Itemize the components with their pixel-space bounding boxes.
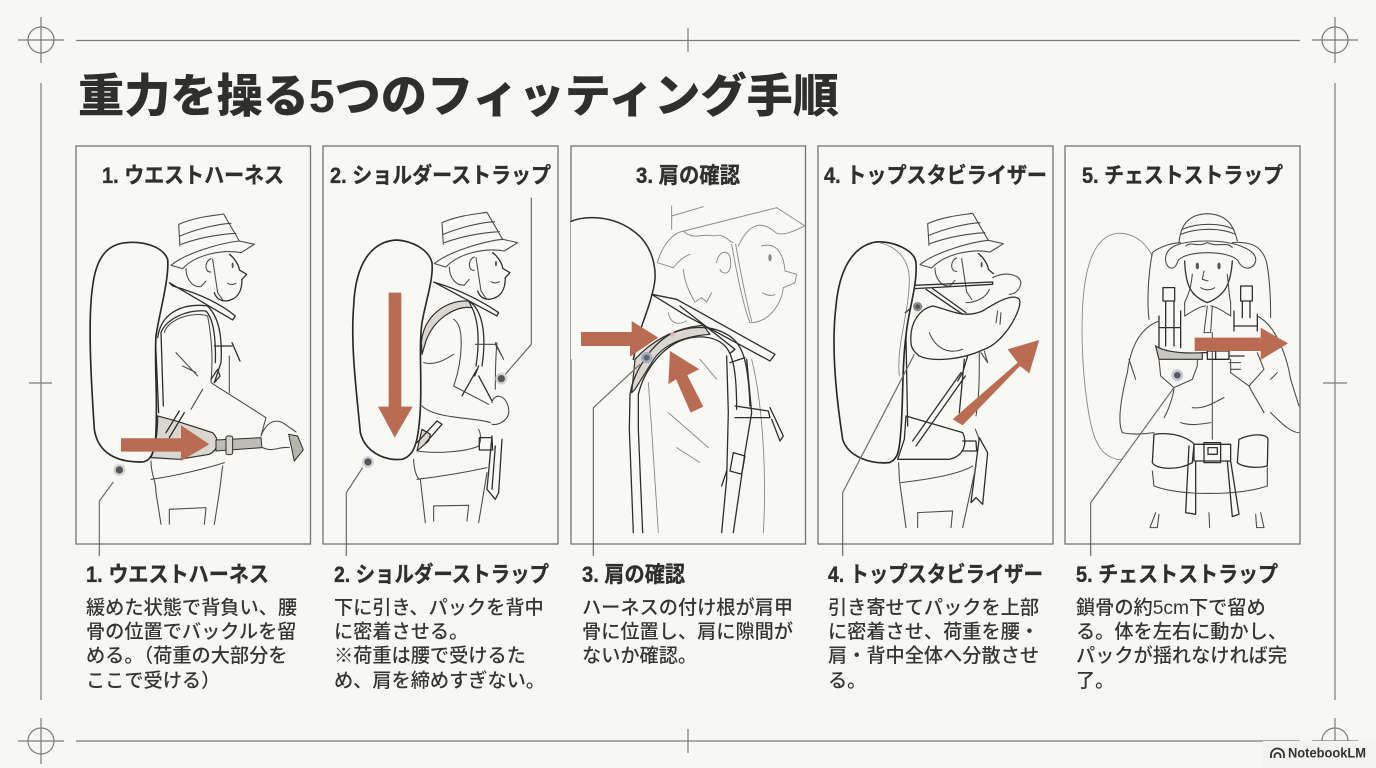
caption text: step 5: 了。 [1076, 671, 1114, 692]
arrow: pull strap down [378, 293, 413, 438]
panel: step 2 shoulder strap [323, 146, 558, 692]
caption text: step 4: 引き寄せてパックを上部 [828, 597, 1039, 619]
caption text: step 1: める。（荷重の大部分を [86, 645, 287, 667]
caption text: step 3: ハーネスの付け根が肩甲 [582, 597, 793, 619]
caption text: step 1: 緩めた状態で背負い、腰 [86, 597, 297, 619]
marker dot and leader line: upper [495, 198, 531, 385]
marker dot and leader line [593, 352, 652, 556]
caption text: step 5: 鎖骨の約5cm下で留め [1076, 597, 1266, 619]
illustration: hiker pulling shoulder straps [346, 198, 531, 556]
heading: step 1: 1. ウエストハーネス [102, 163, 284, 188]
caption text: step 1 [86, 597, 297, 692]
arrow: from below toward shoulder [668, 351, 703, 413]
caption heading: step 1: 1. ウエストハーネス [86, 562, 269, 587]
marker dot and leader line: lower [346, 456, 374, 556]
panel: step 3 shoulder check [571, 146, 806, 667]
arrow: pull chest strap closed [1195, 328, 1288, 360]
title: 重力を操る5つのフィッティング手順 [78, 70, 839, 122]
caption text: step 3: 骨に位置し、肩に隙間が [582, 621, 793, 643]
marker dot and leader line [99, 464, 125, 556]
watermark badge: NotebookLM [1288, 744, 1366, 760]
caption text: step 5: る。体を左右に動かし、 [1076, 621, 1287, 643]
caption text: step 2: め、肩を締めすぎない。 [334, 670, 545, 692]
caption text: step 4: 肩・背中全体へ分散させ [828, 645, 1039, 667]
caption text: step 1: 骨の位置でバックルを留 [86, 621, 296, 643]
arrow: pull stabilizer forward [953, 340, 1039, 425]
marker dot and leader line [1091, 369, 1183, 556]
heading: step 3: 3. 肩の確認 [636, 163, 740, 188]
arrow: from behind toward shoulder [581, 321, 658, 357]
illustration: hiker front view fastening chest strap [1082, 214, 1299, 556]
leader line [843, 354, 914, 556]
caption text: step 4: に密着させ、荷重を腰・ [828, 621, 1039, 643]
caption text: step 3 [582, 597, 793, 667]
illustration: hiker fastening hip belt [90, 214, 303, 556]
caption heading: step 3: 3. 肩の確認 [582, 562, 685, 587]
caption text: step 5 [1076, 597, 1287, 692]
illustration: shoulder close-up [571, 206, 805, 556]
marker dot on stabilizer [913, 302, 922, 311]
illustration: hiker pulling top stabilizer [834, 213, 1039, 556]
arrow: pull belt forward [121, 425, 209, 461]
caption text: step 2: 下に引き、パックを背中 [334, 597, 544, 619]
panel: step 1 waist harness [76, 146, 310, 692]
watermark badge [1263, 741, 1376, 768]
caption text: step 2: に密着させる。 [334, 621, 468, 643]
heading: step 4: 4. トップスタビライザー [824, 163, 1047, 188]
caption text: step 2: ※荷重は腰で受けるた [334, 645, 526, 667]
caption text: step 5: パックが揺れなければ完 [1076, 645, 1287, 667]
caption text: step 4: る。 [828, 671, 866, 692]
caption text: step 1: ここで受ける） [86, 670, 220, 692]
caption heading: step 4: 4. トップスタビライザー [828, 562, 1043, 587]
heading: step 5: 5. チェストストラップ [1082, 163, 1283, 188]
panel: step 5 chest strap [1065, 146, 1300, 692]
caption text: step 4 [828, 597, 1039, 692]
caption heading: step 5: 5. チェストストラップ [1076, 562, 1278, 587]
icon: notebook logo [1271, 748, 1284, 758]
caption heading: step 2: 2. ショルダーストラップ [334, 562, 549, 587]
panel: step 4 top stabilizer [818, 146, 1053, 692]
heading: step 2: 2. ショルダーストラップ [330, 163, 551, 188]
caption text: step 3: ないか確認。 [582, 645, 697, 667]
caption text: step 2 [334, 597, 545, 692]
